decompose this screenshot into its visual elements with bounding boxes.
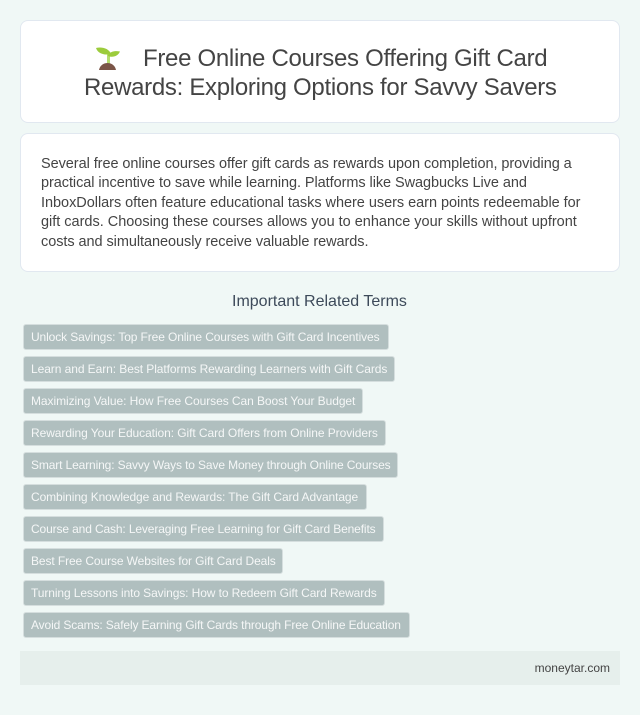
tag 9 (23, 580, 385, 606)
list: related term tags (23, 324, 410, 638)
tag 1 (23, 324, 389, 350)
tag 7: Course and Cash: Leveraging Free Learning for Gift Card Benefits (31, 522, 376, 536)
tag 9: Turning Lessons into Savings: How to Redeem Gift Card Rewards (31, 586, 377, 600)
summary line 5: costs and simultaneously receive valuable rewards. (41, 234, 368, 250)
title line 2: Rewards: Exploring Options for Savvy Savers (84, 74, 557, 101)
title line 1: Free Online Courses Offering Gift Card (143, 45, 547, 72)
footer source text: moneytar.com (535, 661, 610, 675)
tag 7 (23, 516, 384, 542)
tag 3 (23, 388, 363, 414)
tag 4: Rewarding Your Education: Gift Card Offers from Online Providers (31, 426, 378, 440)
summary line 1: Several free online courses offer gift cards as rewards upon completion, providing a (41, 156, 572, 172)
summary line 2: practical incentive to save while learning. Platforms like Swagbucks Live and (41, 175, 527, 191)
footer bar (20, 651, 620, 685)
tag 1: Unlock Savings: Top Free Online Courses with Gift Card Incentives (31, 330, 379, 344)
icon: seedling (96, 48, 120, 70)
tag 5: Smart Learning: Savvy Ways to Save Money through Online Courses (31, 458, 391, 472)
tag 3: Maximizing Value: How Free Courses Can Boost Your Budget (31, 394, 355, 408)
panel: title card (20, 20, 620, 123)
panel: summary text (20, 133, 620, 272)
heading: related terms: Important Related Terms (232, 293, 407, 310)
summary line 3: InboxDollars often feature educational tasks where users earn points redeemable for (41, 195, 580, 211)
tag 2 (23, 356, 395, 382)
tag 6 (23, 484, 367, 510)
tag 6: Combining Knowledge and Rewards: The Gift Card Advantage (31, 490, 358, 504)
tag 2: Learn and Earn: Best Platforms Rewarding Learners with Gift Cards (31, 362, 387, 376)
tag 8 (23, 548, 283, 574)
summary line 4: gift cards. Choosing these courses allows you to enhance your skills without upfront (41, 214, 577, 230)
tag 10 (23, 612, 410, 638)
tag 10: Avoid Scams: Safely Earning Gift Cards through Free Online Education (31, 618, 401, 632)
tag 8: Best Free Course Websites for Gift Card Deals (31, 554, 276, 568)
tag 5 (23, 452, 398, 478)
tag 4 (23, 420, 386, 446)
